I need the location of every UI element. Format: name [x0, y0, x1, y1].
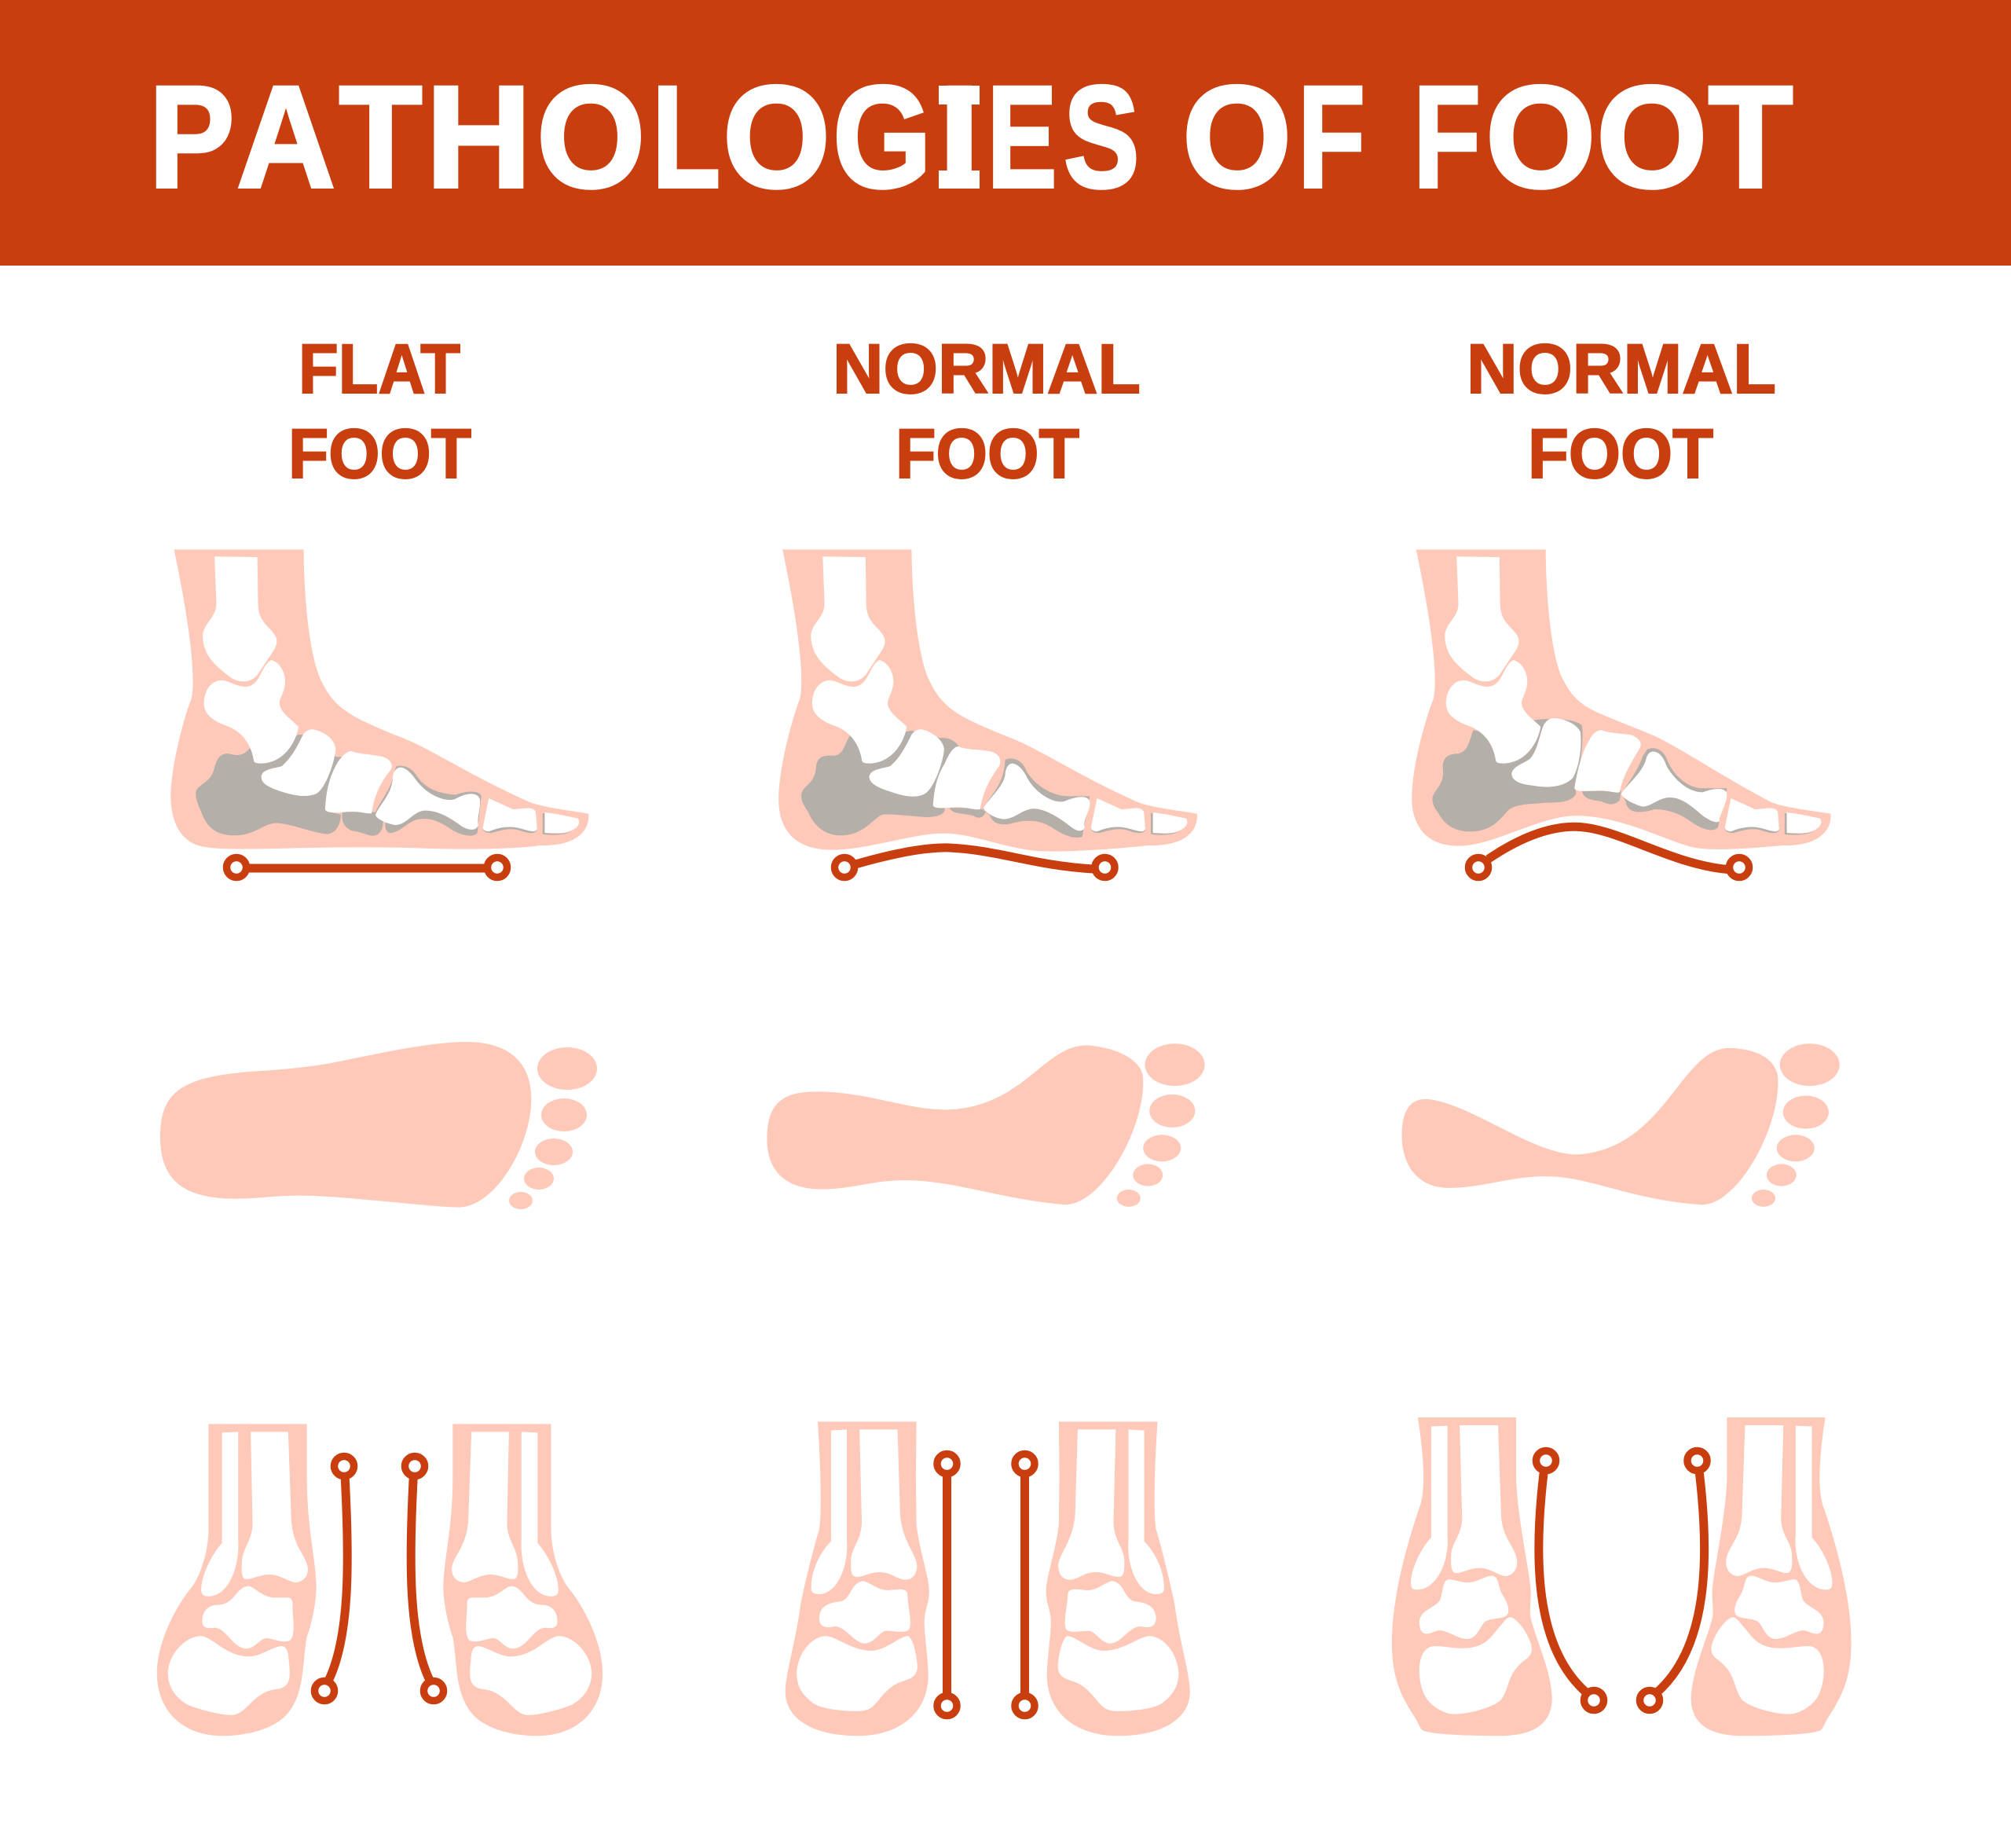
title: T: [1708, 57, 1793, 218]
title: [149, 57, 1793, 218]
heading: normal foot (centre): FOOT: [896, 414, 1079, 493]
heading: normal foot (right): [1467, 329, 1776, 493]
arch line: normal right: [1469, 827, 1749, 877]
ankle lines: normal centre: [937, 1454, 1035, 1716]
ankle lines: flat foot: [314, 1457, 443, 1700]
title: E: [987, 57, 1057, 218]
heading: normal foot (right): FOOT: [1528, 414, 1713, 493]
heading: normal foot (centre): [833, 329, 1141, 493]
title: S: [1064, 57, 1139, 218]
side view skeleton: normal foot centre: [778, 549, 1197, 852]
heading: flat foot: [288, 329, 471, 493]
title: A: [236, 57, 335, 218]
title: G: [833, 57, 932, 218]
title: I: [939, 57, 980, 218]
footprint: flat foot: [160, 1042, 597, 1209]
title: F: [1298, 57, 1365, 218]
heading: normal foot (right): NORMAL: [1467, 329, 1776, 408]
title: F: [1413, 57, 1481, 218]
title: O: [723, 57, 830, 218]
arch line: normal centre: [834, 848, 1115, 877]
rear view: flat foot pair: [157, 1424, 603, 1736]
title: O: [537, 57, 646, 218]
title: O: [1182, 57, 1291, 218]
ankle lines: normal right: [1537, 1450, 1707, 1710]
header banner: [0, 0, 2011, 266]
title: O: [1485, 57, 1596, 218]
side view skeleton: normal foot right: [1412, 549, 1830, 849]
title: H: [426, 57, 532, 218]
heading: flat foot: FOOT: [288, 414, 471, 493]
rear view: normal foot pair centre: [786, 1421, 1190, 1736]
heading: normal foot (centre): NORMAL: [833, 329, 1141, 408]
heading: flat foot: FLAT: [299, 329, 460, 408]
title: O: [1596, 57, 1708, 218]
footprint: normal foot centre: [767, 1043, 1205, 1207]
footprint: normal foot right: [1402, 1043, 1840, 1207]
rear view: normal foot pair right: [1392, 1417, 1852, 1736]
title: T: [339, 57, 423, 218]
title: L: [652, 57, 720, 218]
title: P: [149, 57, 235, 218]
arch line: flat: [226, 858, 507, 877]
side view skeleton: flat foot: [170, 549, 588, 849]
